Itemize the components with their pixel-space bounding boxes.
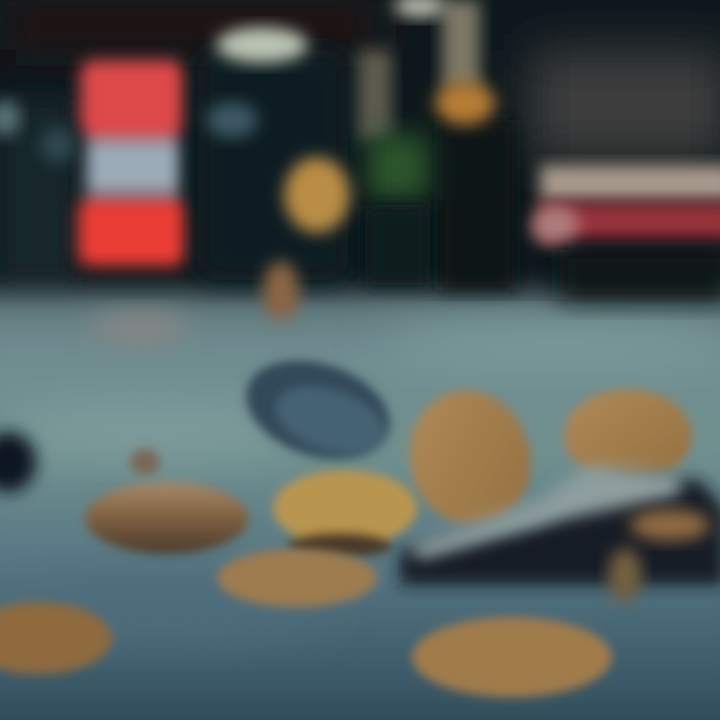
coin: tall standing right bbox=[564, 389, 692, 481]
table surface bbox=[0, 292, 720, 720]
background: dark upper wall bbox=[0, 0, 720, 310]
coin: tall standing centre bbox=[394, 377, 546, 539]
coin: bottom centre bbox=[217, 549, 377, 607]
coin: bottom right large bbox=[412, 617, 612, 697]
dark blue tilted coin bbox=[233, 343, 403, 477]
coin: bottom left bbox=[0, 602, 112, 674]
coin: yellow centre bbox=[273, 470, 417, 558]
bottles and small amber lights bbox=[263, 0, 515, 321]
right side: white and red stripes bbox=[531, 165, 720, 300]
dark object at left edge bbox=[0, 432, 36, 492]
coin: brown left bbox=[85, 449, 249, 554]
dark navy column with white oval lamp bbox=[0, 27, 348, 280]
sign: red and white stacked panels bbox=[78, 60, 186, 266]
banknote: white and dark folded sheet bbox=[400, 465, 720, 602]
